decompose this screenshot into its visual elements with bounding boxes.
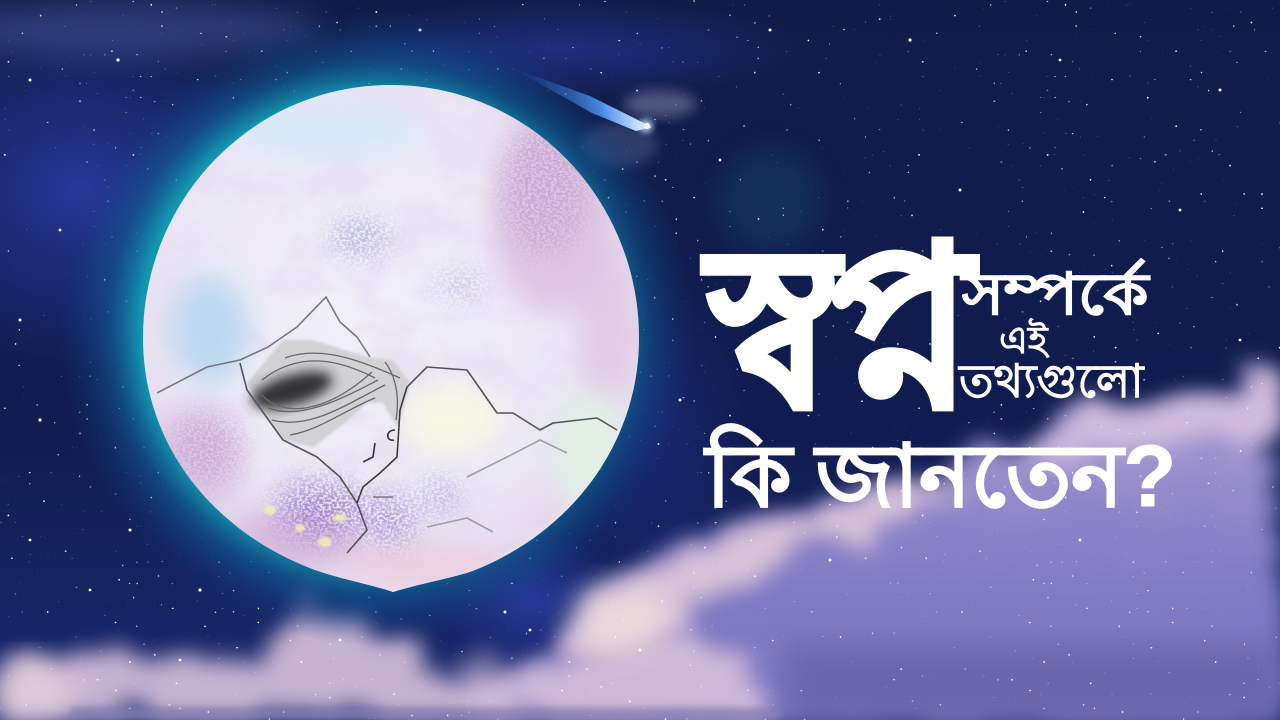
sleeper: hair (247, 340, 410, 447)
blue nebula (0, 0, 820, 670)
title word: স্বপ্ন: স্বপ্ন (708, 203, 968, 454)
moon halo (58, 10, 694, 646)
comet (512, 68, 696, 167)
clouds (0, 372, 1280, 720)
title question: কি জানতেন? (706, 428, 1176, 525)
cloud: lavender bank (480, 372, 1280, 720)
cloud: pink centre (560, 480, 960, 665)
subtitle line 3: তথ্যগুলো (959, 355, 1144, 407)
subtitle line 1: সম্পর্কে (962, 262, 1148, 327)
cloud: pink lower left (0, 610, 760, 720)
cloud: pink upper right (1010, 380, 1280, 465)
subtitle text block (958, 258, 1151, 407)
moon (130, 75, 650, 605)
cloud: dark lower band (785, 645, 1280, 720)
subtitle line 2: এই (999, 320, 1048, 362)
sleeper: pillow and blanket outlines (157, 297, 617, 553)
gold sparkles (264, 505, 347, 547)
